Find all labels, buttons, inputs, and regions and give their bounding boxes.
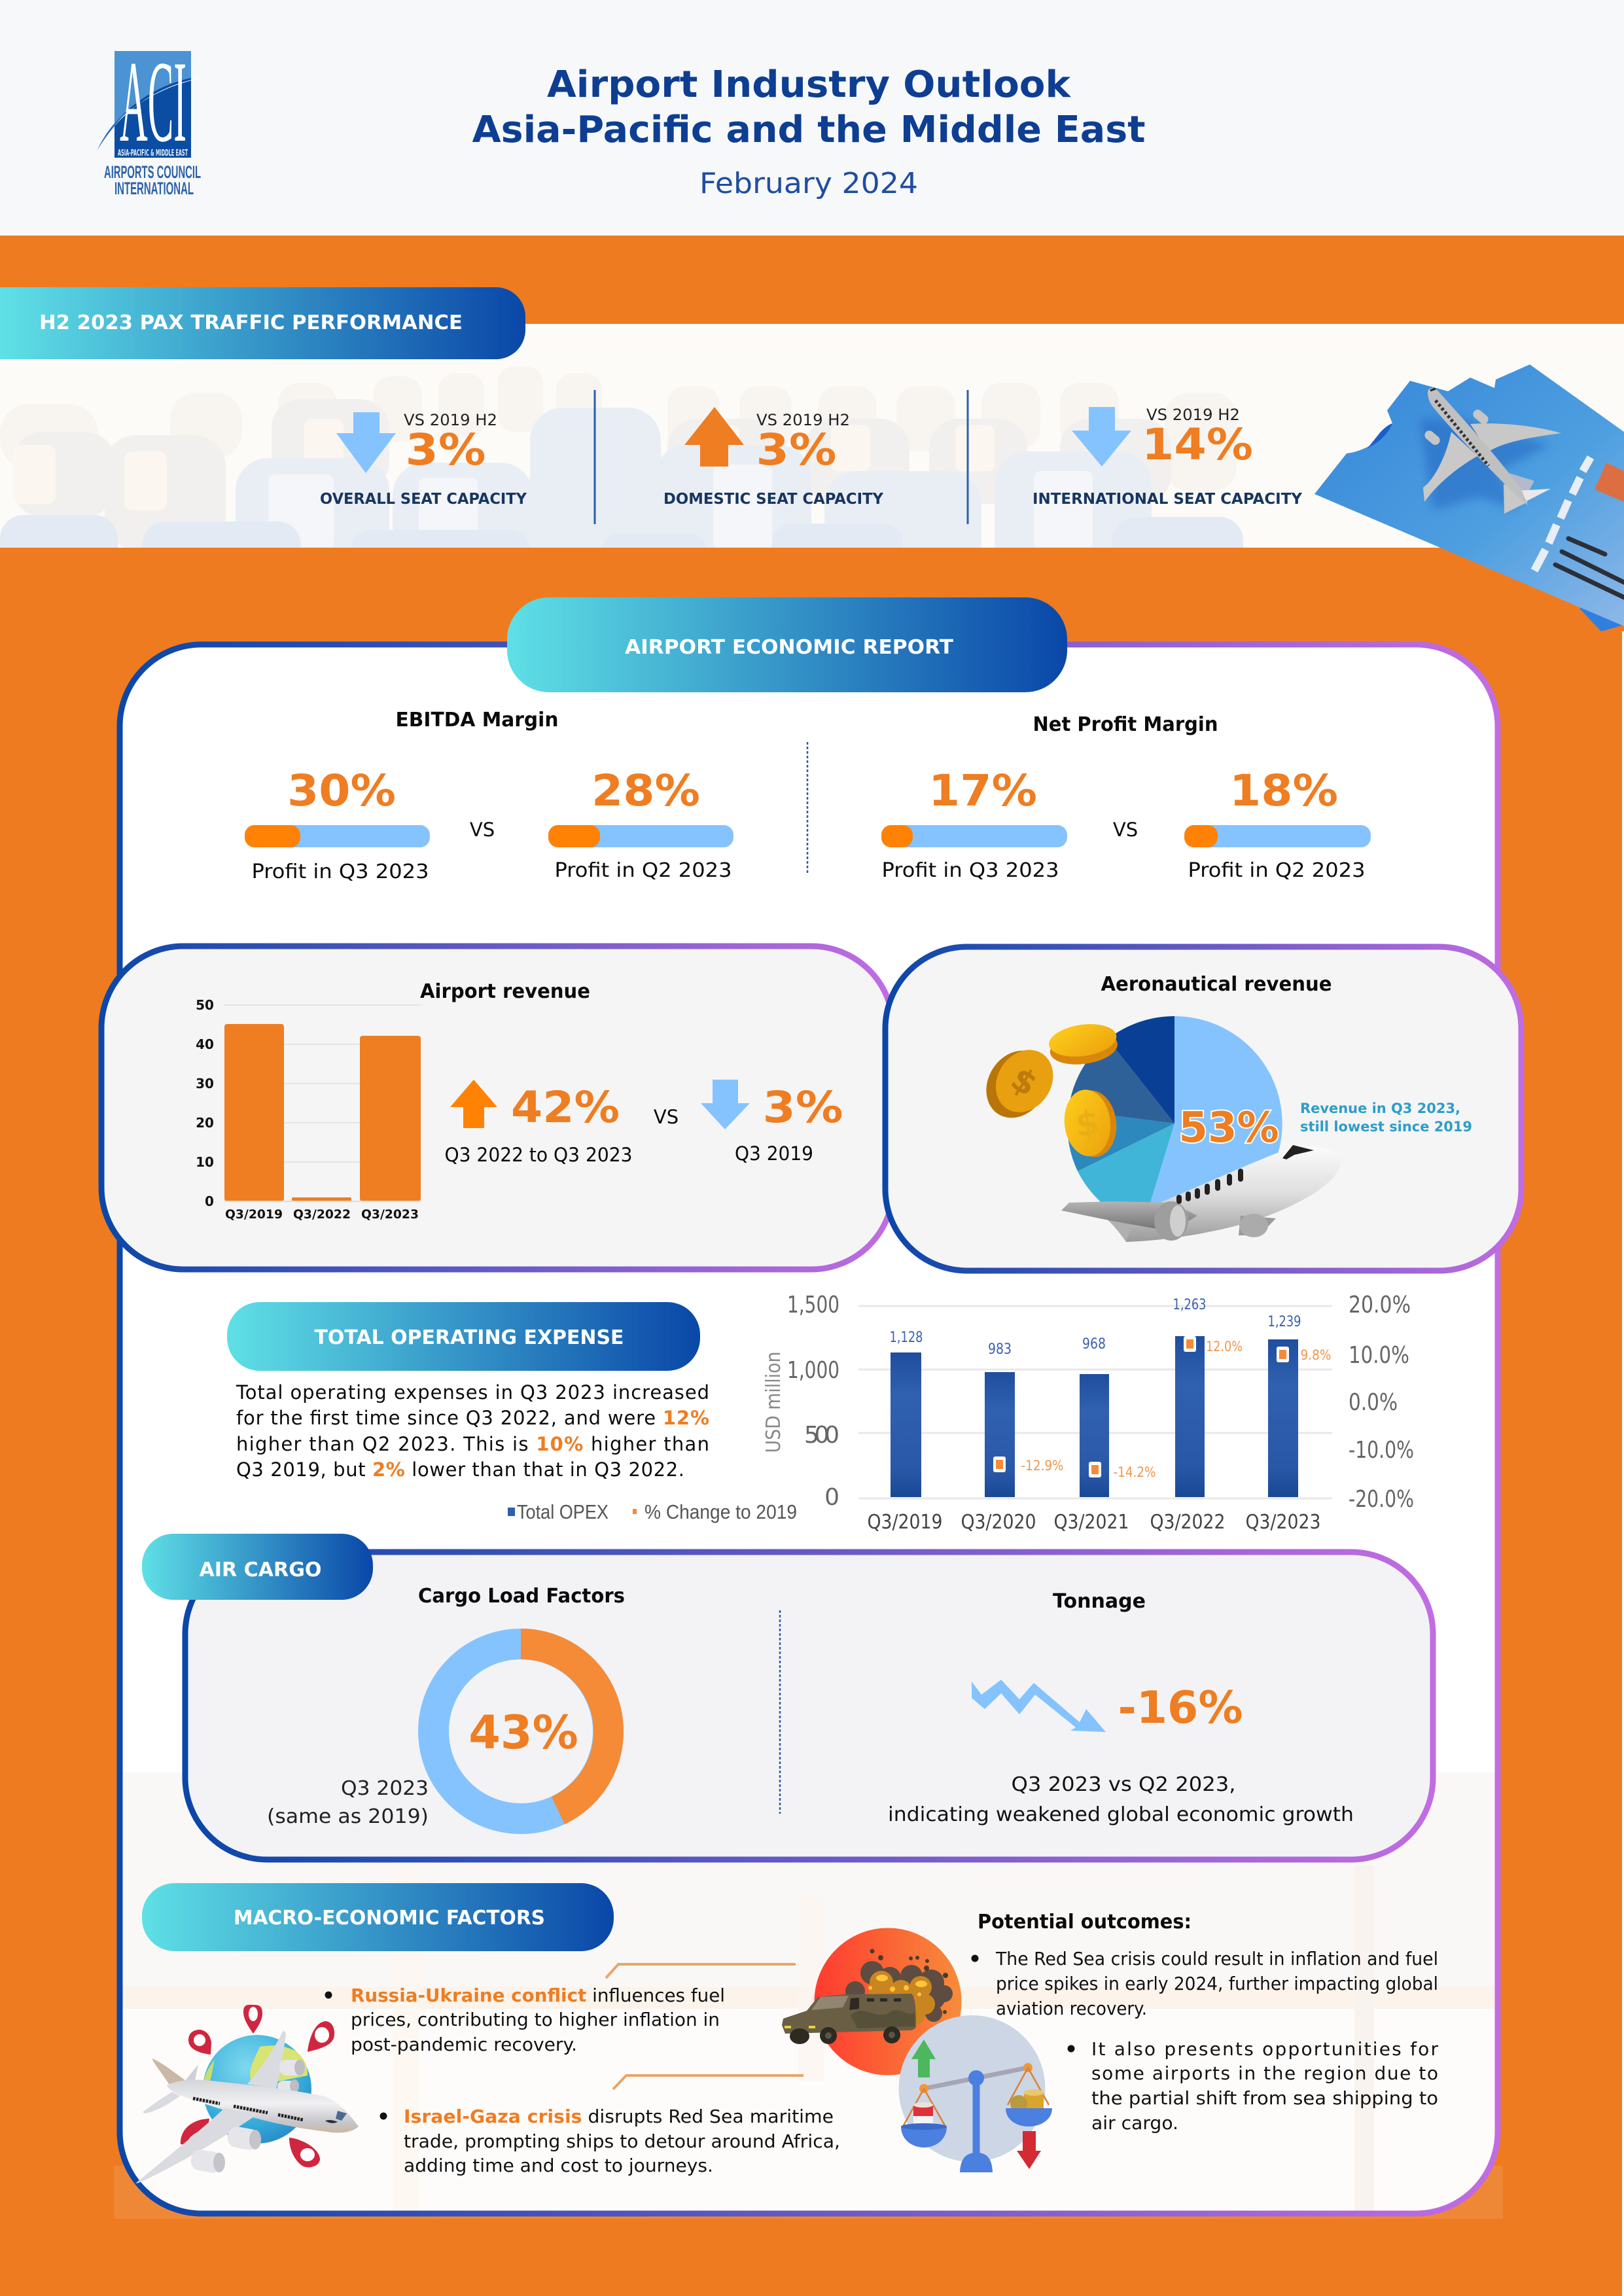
pill: total operating expense: TOTAL OPERATING EXPENSE [314,1326,624,1349]
header [0,0,1624,236]
combo chart: total OPEX: Q3/2019 [868,1511,942,1534]
metric: up 42%: 42% [511,1082,620,1133]
panel: main report card [101,597,1521,2219]
panel: air cargo: -16% [1118,1682,1243,1734]
block: EBITDA margin: EBITDA Margin [395,709,559,732]
text: opex description: Total operating expenses in Q3 2023 increased [236,1381,709,1404]
metric: down 3% [701,1080,843,1165]
note: Q3 2023 same as 2019 [267,1777,429,1828]
bullet: opportunities air cargo [1068,2038,1438,2134]
donut chart: cargo load factor [433,1629,624,1824]
bar chart: airport revenue: 0 [205,1193,214,1209]
icon: gold coins [974,1020,1120,1160]
text: potential outcomes: Potential outcomes: [978,1911,1192,1934]
metric: 17% Q3 2023 [881,766,1067,882]
logo: ACI: INTERNATIONAL [115,179,194,198]
lower background image tint [123,1865,1494,2210]
background: cabin seats [0,324,1624,548]
text: tonnage note: Q3 2023 vs Q2 2023, [1012,1773,1235,1796]
chart legend [508,1500,797,1523]
illustration: globe and plane [135,2005,359,2183]
combo chart: total OPEX: 0.0% [1349,1389,1398,1416]
divider [967,390,968,524]
combo chart: total OPEX: 1,000 [787,1357,839,1384]
callout: revenue note: Revenue in Q3 2023, [1300,1101,1460,1116]
pill: air cargo [142,1534,373,1600]
combo chart: total OPEX [762,1292,1414,1534]
block: macro-economic factors [135,1883,1438,2183]
stat: domestic seat capacity [663,407,883,508]
bullet: opportunities air cargo: air cargo. [1091,2112,1178,2134]
metric: up 42%: Q3 2022 to Q3 2023 [445,1144,632,1166]
combo chart: total OPEX: 1,500 [787,1292,839,1318]
right edge strip [1622,631,1624,2296]
bar chart: airport revenue: 20 [196,1115,214,1131]
metric: 30% Q3 2023: 30% [287,766,396,816]
callout: revenue note: still lowest since 2019 [1300,1119,1472,1135]
combo chart: total OPEX: -10.0% [1349,1437,1414,1464]
metric: 18% Q2 2023: 18% [1229,766,1338,816]
metric: up 42% [445,1080,632,1166]
text: tonnage note [888,1773,1354,1826]
combo chart: total OPEX: 20.0% [1349,1292,1411,1318]
note: Q3 2023 same as 2019: (same as 2019) [267,1805,429,1828]
icon: gold coins: $ [1074,1103,1101,1145]
stat: domestic seat capacity: VS 2019 H2 [756,411,850,429]
text: opex description [236,1381,709,1481]
metric: 18% Q2 2023: Profit in Q2 2023 [1188,859,1365,882]
combo chart: total OPEX: 10.0% [1349,1342,1409,1369]
divider [594,390,595,524]
stat: overall seat capacity: VS 2019 H2 [404,411,497,429]
combo chart: total OPEX: 9.8% [1301,1347,1331,1363]
combo chart: total OPEX: Q3/2021 [1053,1511,1129,1534]
metric: 30% Q3 2023 [245,766,430,883]
text: Russia-Ukraine conflict: prices, contributing to higher inflation in [351,2009,720,2030]
metric: 17% Q3 2023: 17% [928,766,1037,816]
pill: airport economic report: AIRPORT ECONOMIC REPORT [625,636,954,659]
combo chart: total OPEX: Q3/2023 [1246,1511,1320,1534]
panel: airport revenue [101,946,893,1269]
text: Israel-Gaza crisis: adding time and cost to journeys. [404,2155,713,2176]
combo chart: total OPEX: 1,263 [1173,1297,1207,1313]
pill: total operating expense [227,1302,700,1371]
stat: international seat capacity [1033,406,1302,508]
bar chart: airport revenue [196,997,421,1222]
title: Airport Industry Outlook [547,63,1072,106]
bullet: opportunities air cargo: some airports in the region due to [1091,2062,1438,2084]
combo chart: total OPEX: 0 [824,1484,839,1511]
panel: air cargo [142,1534,1433,1860]
icon: gold coins: $ [1004,1059,1044,1104]
panel: air cargo: Cargo Load Factors [418,1585,625,1608]
chart legend: % Change to 2019 [644,1500,797,1523]
bar chart: airport revenue: 50 [196,997,214,1013]
text: potential outcomes [971,1911,1438,2134]
text: Israel-Gaza crisis: Israel-Gaza crisis disrupts Red Sea maritime [404,2106,834,2127]
block: net profit margin: Net Profit Margin [1033,713,1218,736]
combo chart: total OPEX: 12.0% [1206,1339,1243,1354]
metric: 28% Q2 2023 [548,766,733,882]
panel: air cargo: Tonnage [1053,1590,1146,1613]
bullet: opportunities air cargo: the partial shift from sea shipping to [1091,2087,1438,2109]
bar chart: airport revenue: Q3/2022 [293,1207,351,1222]
combo chart: total OPEX: 1,239 [1268,1314,1301,1330]
bar chart: airport revenue: 40 [196,1036,214,1052]
logo: ACI: AIRPORTS COUNCIL [104,162,201,182]
combo chart: total OPEX: USD million [762,1352,785,1453]
note: Q3 2023 same as 2019: Q3 2023 [341,1777,429,1800]
metric: 30% Q3 2023: Profit in Q3 2023 [251,860,429,883]
pill: macro-economic factors [142,1883,614,1951]
bullet: Red Sea inflation: The Red Sea crisis could result in inflation and fuel [995,1948,1438,1969]
metric: 28% Q2 2023: 28% [591,766,700,816]
connector lines [606,1964,803,2089]
stat: overall seat capacity: OVERALL SEAT CAPACITY [320,491,527,508]
text: Israel-Gaza crisis: trade, prompting ships to detour around Africa, [404,2130,840,2152]
logo: ACI: ASIA-PACIFIC & MIDDLE EAST [118,149,188,158]
panel: aeronautical revenue: 53% [1178,1104,1279,1152]
text: Israel-Gaza crisis [380,2106,840,2176]
bar chart: airport revenue: Q3/2019 [225,1207,283,1222]
title: February 2024 [699,167,918,200]
combo chart: total OPEX: 968 [1082,1336,1106,1352]
bar chart: airport revenue: 30 [196,1076,214,1091]
block: EBITDA margin: VS [470,819,495,841]
combo chart: total OPEX: Q3/2020 [961,1511,1036,1534]
combo chart: total OPEX: -12.9% [1021,1458,1064,1474]
panel: aeronautical revenue: Aeronautical revenue [1101,973,1332,996]
metric: 28% Q2 2023: Profit in Q2 2023 [555,859,732,882]
text: tonnage note: indicating weakened global economic growth [888,1803,1354,1826]
icon: zigzag down arrow [972,1680,1106,1732]
block: net profit margin: VS [1113,819,1138,841]
bullet: Red Sea inflation [971,1948,1438,2019]
panel: airport revenue: VS [654,1106,679,1128]
bullet: Red Sea inflation: aviation recovery. [996,1998,1147,2019]
text: opex description: for the first time since Q3 2022, and were 12% [236,1407,709,1429]
panel: H2 2023 pax traffic performance [0,287,1624,631]
callout: revenue note [1300,1101,1472,1135]
header: ACI [120,37,186,166]
section pill: H2 2023: H2 2023 PAX TRAFFIC PERFORMANCE [39,311,463,334]
stat: domestic seat capacity: DOMESTIC SEAT CAPACITY [663,491,883,508]
bullet: Red Sea inflation: price spikes in early 2024, further impacting global [996,1973,1438,1994]
pie chart: aeronautical revenue [1067,1016,1282,1231]
bullet: opportunities air cargo: It also presents opportunities for [1091,2038,1438,2060]
text: Russia-Ukraine conflict: post-pandemic recovery. [351,2034,577,2055]
combo chart: total OPEX: -14.2% [1114,1464,1156,1480]
illustration: balance scale [899,2015,1052,2172]
text: opex description: Q3 2019, but 2% lower than that in Q3 2022. [236,1458,684,1481]
combo chart: total OPEX: 983 [988,1341,1012,1358]
stat: domestic seat capacity: 3% [756,425,836,475]
pill: air cargo: AIR CARGO [199,1559,322,1581]
combo chart: total OPEX: Q3/2022 [1150,1511,1225,1534]
block: net profit margin [881,713,1371,882]
section pill: H2 2023 [0,287,525,359]
title [472,63,1145,200]
pill: macro-economic factors: MACRO-ECONOMIC FACTORS [234,1907,545,1930]
stat: overall seat capacity: 3% [406,425,485,475]
metric: 17% Q3 2023: Profit in Q3 2023 [882,859,1059,882]
bar chart: airport revenue: Q3/2023 [361,1207,419,1222]
combo chart: total OPEX: 500 [804,1422,839,1449]
logo: ACI [97,37,211,198]
combo chart: total OPEX: -20.0% [1349,1486,1414,1513]
metric: down 3%: 3% [763,1082,843,1133]
title: Asia-Pacific and the Middle East [472,109,1145,151]
stat: international seat capacity: INTERNATIONAL SEAT CAPACITY [1033,491,1302,508]
metric: 18% Q2 2023 [1184,766,1371,882]
stat: international seat capacity: VS 2019 H2 [1146,406,1240,424]
stat: overall seat capacity [320,411,527,508]
text: opex description: higher than Q2 2023. This is 10% higher than [236,1433,709,1455]
orange stub on ticket [1595,463,1624,502]
block: total operating expense [227,1292,1414,1534]
illustration: conflict vehicle explosion [782,1928,962,2075]
image: boarding tickets with plane [1315,364,1624,631]
pill: airport economic report [507,597,1067,692]
chart legend: Total OPEX [517,1500,609,1523]
text: Russia-Ukraine conflict [325,1985,725,2055]
icon: airplane [1061,1145,1341,1242]
panel: aeronautical revenue [885,947,1521,1271]
plane on ticket [1420,388,1561,514]
text: Russia-Ukraine conflict: Russia-Ukraine conflict influences fuel [351,1985,725,2006]
panel: airport revenue: Airport revenue [420,980,590,1003]
stat: international seat capacity: 14% [1142,419,1253,470]
donut chart: cargo load factor: 43% [468,1706,578,1759]
bar chart: airport revenue: 10 [196,1154,214,1170]
metric: down 3%: Q3 2019 [735,1142,813,1165]
block: EBITDA margin [245,709,733,883]
combo chart: total OPEX: 1,128 [890,1330,923,1346]
